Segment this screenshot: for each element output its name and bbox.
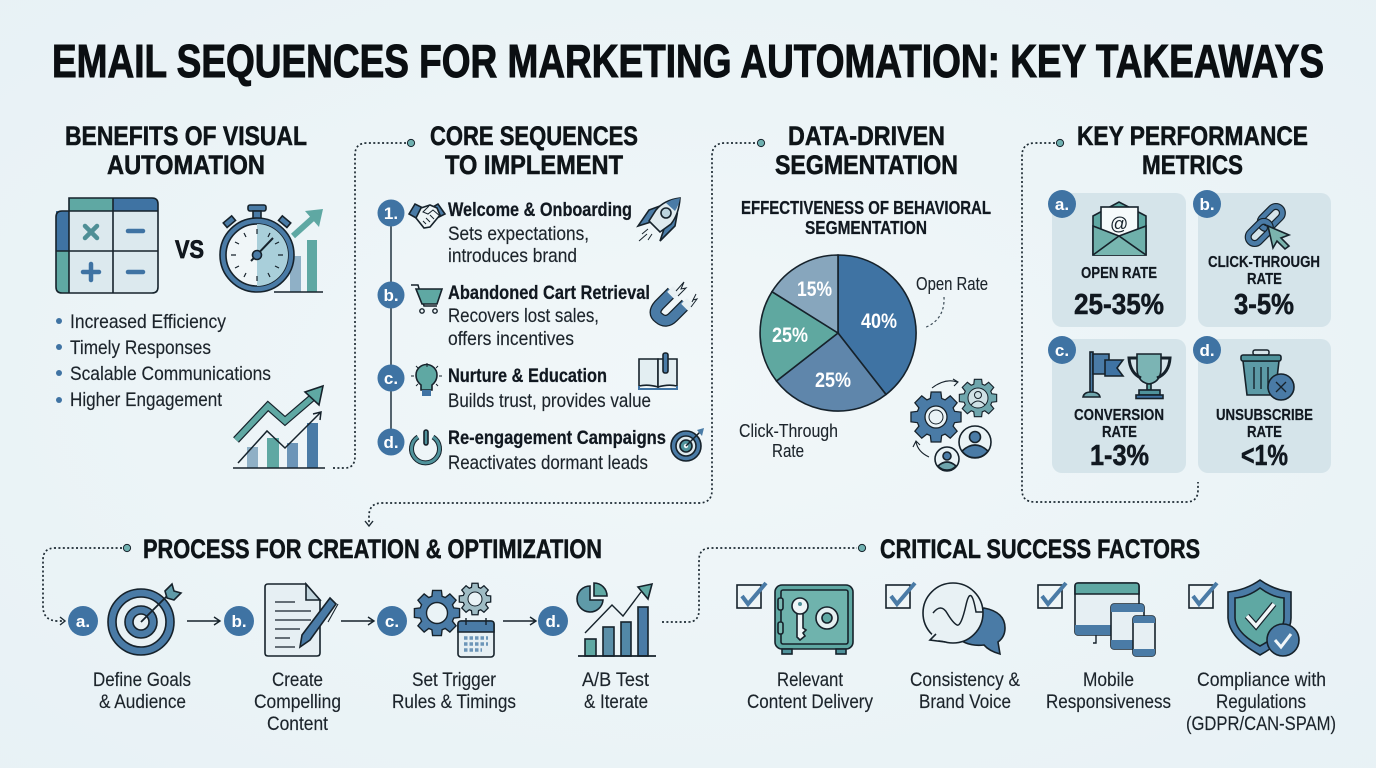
panel: data-driven segmentation <box>739 121 997 471</box>
badge: b.: b. <box>383 286 399 305</box>
connector: process <box>43 544 131 625</box>
step d: a/b test <box>538 583 656 713</box>
card: open rate <box>1048 190 1186 327</box>
card: click-through rate <box>1193 190 1331 327</box>
timeline line <box>390 226 392 429</box>
text: re-engagement: Re-engagement Campaigns <box>448 427 666 449</box>
card: click-through rate: b. <box>1199 195 1215 214</box>
chart title: EFFECTIVENESS OF BEHAVIORAL <box>741 198 991 218</box>
heading: process: PROCESS FOR CREATION & OPTIMIZATION <box>143 534 602 564</box>
heading: metrics: KEY PERFORMANCE <box>1077 121 1308 151</box>
label: open rate: Open Rate <box>916 274 988 294</box>
text: abandoned cart <box>448 282 650 350</box>
card: open rate: OPEN RATE <box>1081 265 1157 282</box>
icon: power button <box>412 430 440 463</box>
connector: metrics <box>1022 139 1198 502</box>
factor: consistency and brand voice: Consistency & <box>910 669 1020 691</box>
heading: success factors: CRITICAL SUCCESS FACTORS <box>880 534 1200 564</box>
card: open rate: 25-35% <box>1074 289 1164 321</box>
text: abandoned cart: Recovers lost sales, <box>448 305 599 327</box>
factor: consistency and brand voice: Brand Voice <box>919 691 1011 713</box>
factor: compliance with regulations <box>1186 580 1336 735</box>
text: abandoned cart: Abandoned Cart Retrieval <box>448 282 650 304</box>
icon: stopwatch with growth chart <box>220 205 323 292</box>
icon: growth chart <box>233 386 325 468</box>
connector: core sequences to data segmentation <box>365 139 765 526</box>
list: benefits: Increased Efficiency <box>70 311 226 333</box>
arrow <box>187 617 220 625</box>
heading: core sequences: TO IMPLEMENT <box>445 150 623 180</box>
panel: key performance metrics <box>1048 121 1331 473</box>
label: open rate <box>916 274 988 328</box>
card: unsubscribe rate: <1% <box>1241 440 1288 472</box>
icon: gears and users <box>911 379 997 471</box>
chart title: SEGMENTATION <box>805 218 927 238</box>
icon: light bulb <box>411 363 442 396</box>
text: welcome: introduces brand <box>448 245 577 267</box>
label: click-through rate: Rate <box>772 441 804 461</box>
card: open rate: @ <box>1110 214 1128 234</box>
text: re-engagement <box>448 427 666 474</box>
text: nurture <box>448 365 651 412</box>
card: click-through rate: RATE <box>1247 271 1282 288</box>
text: welcome: Sets expectations, <box>448 223 589 245</box>
text: welcome: Welcome & Onboarding <box>448 199 632 221</box>
pie chart: 40% <box>861 310 897 333</box>
step b: create content <box>224 584 341 735</box>
list: benefits: Scalable Communications <box>70 363 271 385</box>
text: nurture: Builds trust, provides value <box>448 390 651 412</box>
icon: handshake <box>409 204 445 228</box>
card: click-through rate: 3-5% <box>1234 289 1294 321</box>
pie chart: 15% <box>797 278 832 301</box>
panel: core sequences to implement <box>378 121 704 474</box>
panel: critical success factors <box>737 534 1336 735</box>
step d: a/b test: d. <box>545 612 561 631</box>
factor: relevant content delivery: Content Delivery <box>747 691 873 713</box>
panel: benefits of visual automation <box>56 121 325 468</box>
card: conversion rate <box>1048 336 1186 473</box>
factor: compliance with regulations: Regulations <box>1216 691 1306 713</box>
connector: benefits to core sequences <box>333 139 415 468</box>
icon: magnet <box>656 282 697 321</box>
badge: c. <box>378 364 404 392</box>
heading: data-driven: SEGMENTATION <box>775 150 958 180</box>
factor: mobile responsiveness: Responsiveness <box>1046 691 1171 713</box>
step b: create content: Compelling <box>254 691 341 713</box>
card: unsubscribe rate: d. <box>1199 341 1215 360</box>
chart title <box>741 198 991 238</box>
badge: 1.: 1. <box>384 204 398 223</box>
heading: data-driven <box>775 121 958 180</box>
step c: set triggers: Rules & Timings <box>392 691 516 713</box>
factor: consistency and brand voice <box>886 583 1020 713</box>
text: abandoned cart: offers incentives <box>448 328 574 350</box>
step a: define goals: & Audience <box>99 691 186 713</box>
card: conversion rate: c. <box>1055 341 1069 360</box>
heading: data-driven: DATA-DRIVEN <box>788 121 945 151</box>
factor: relevant content delivery: Relevant <box>777 669 843 691</box>
badge: b. <box>378 282 404 308</box>
step d: a/b test: & Iterate <box>584 691 648 713</box>
badge: d. <box>378 428 404 456</box>
factor: compliance with regulations: (GDPR/CAN-SPAM) <box>1186 713 1336 735</box>
pie chart <box>760 255 916 411</box>
icon: rocket <box>638 198 680 241</box>
step c: set triggers: Set Trigger <box>412 669 496 691</box>
step c: set triggers: c. <box>385 612 399 631</box>
label: click-through rate <box>739 421 838 461</box>
card: unsubscribe rate: RATE <box>1247 424 1282 441</box>
pie chart: 25% <box>772 324 808 347</box>
text: nurture: Nurture & Education <box>448 365 607 387</box>
card: open rate: a. <box>1055 195 1069 214</box>
step b: create content: Create <box>272 669 323 691</box>
factor: relevant content delivery <box>737 583 873 713</box>
factor: compliance with regulations: Compliance with <box>1197 669 1326 691</box>
list: benefits: Timely Responses <box>70 337 211 359</box>
factor: mobile responsiveness <box>1038 583 1171 713</box>
label: click-through rate: Click-Through <box>739 421 838 441</box>
icon: spreadsheet calculator <box>56 198 158 293</box>
badge: 1. <box>378 200 404 226</box>
list: benefits <box>56 311 271 411</box>
step a: define goals: a. <box>76 612 90 631</box>
icon: open book <box>639 353 677 389</box>
badge: d.: d. <box>383 433 399 452</box>
card: conversion rate: 1-3% <box>1090 440 1149 472</box>
text: welcome <box>448 199 632 267</box>
heading: core sequences <box>430 121 638 180</box>
step d: a/b test: A/B Test <box>582 669 650 691</box>
card: conversion rate: RATE <box>1102 424 1137 441</box>
step a: define goals: Define Goals <box>93 669 191 691</box>
card: unsubscribe rate: UNSUBSCRIBE <box>1216 407 1313 424</box>
arrow <box>341 617 374 625</box>
panel: process for creation and optimization <box>68 534 656 735</box>
card: conversion rate: CONVERSION <box>1074 407 1164 424</box>
list: benefits: Higher Engagement <box>70 389 223 411</box>
text: re-engagement: Reactivates dormant leads <box>448 452 648 474</box>
heading: metrics <box>1077 121 1308 180</box>
step b: create content: b. <box>231 612 247 631</box>
card: click-through rate: CLICK-THROUGH <box>1208 254 1320 271</box>
icon: small target <box>671 428 704 461</box>
heading: metrics: METRICS <box>1142 150 1243 180</box>
heading: benefits: AUTOMATION <box>107 150 265 180</box>
card: unsubscribe rate <box>1193 336 1331 473</box>
step c: set triggers <box>377 583 516 713</box>
step a: define goals <box>68 584 191 713</box>
text: vs: VS <box>175 236 204 264</box>
icon: shopping cart <box>411 285 442 313</box>
factor: mobile responsiveness: Mobile <box>1083 669 1134 691</box>
step b: create content: Content <box>267 713 329 735</box>
arrow <box>503 617 536 625</box>
badge: c.: c. <box>384 369 398 388</box>
heading: benefits: BENEFITS OF VISUAL <box>65 121 307 151</box>
heading: core sequences: CORE SEQUENCES <box>430 121 638 151</box>
connector: success factors <box>662 544 866 622</box>
pie chart: 25% <box>815 369 851 392</box>
heading: benefits <box>65 121 307 180</box>
